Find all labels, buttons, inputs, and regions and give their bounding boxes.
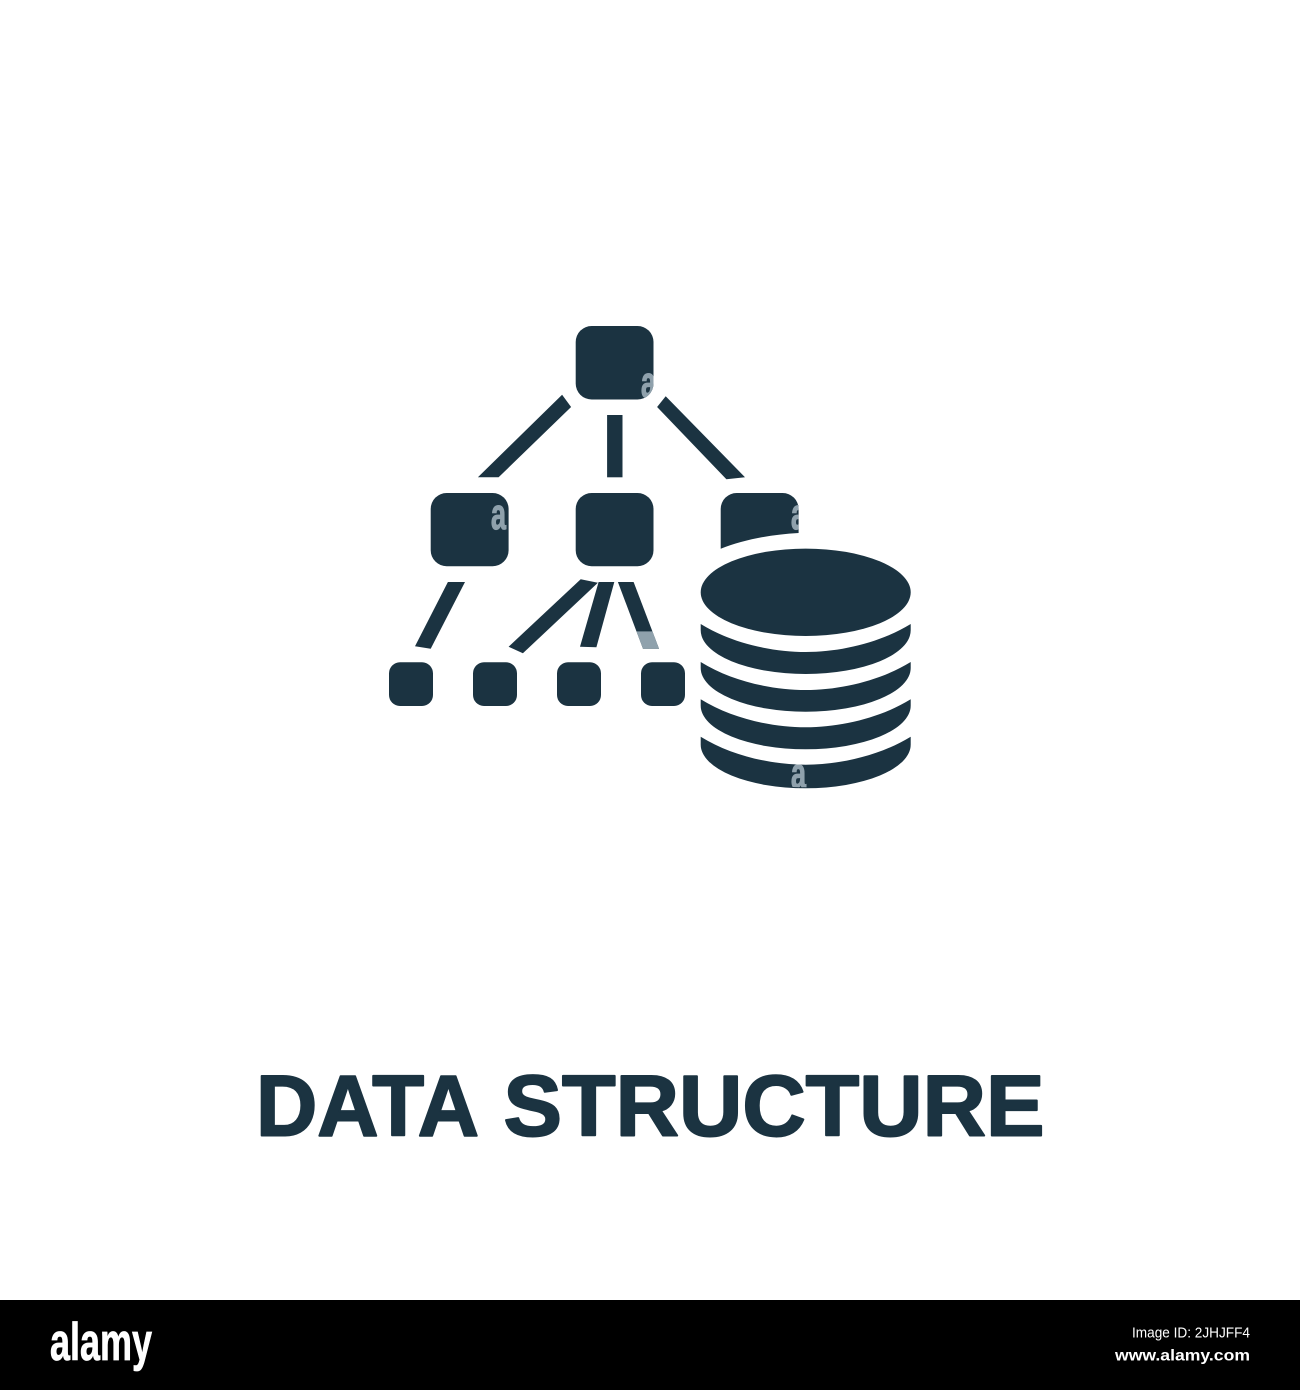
connector: root to center child	[607, 415, 622, 477]
footer bar	[0, 1300, 1300, 1390]
image id: Image ID: 2JHJFF4	[1132, 1324, 1250, 1342]
database band 2	[701, 662, 911, 712]
connector: left child to leaf 1	[415, 582, 465, 649]
watermark marks over icon	[491, 358, 806, 798]
title word: DATA: DATA	[256, 1058, 479, 1154]
leaf node 3	[557, 662, 601, 706]
watermark letter on right child: a	[791, 490, 806, 539]
leaf node 4	[641, 662, 685, 706]
leaf node 1	[389, 662, 433, 706]
connector: center child to leaf 2	[509, 579, 598, 653]
connector: center child to leaf 4	[618, 582, 659, 649]
right child node, cut by database	[721, 493, 799, 549]
infographic canvas	[0, 326, 1300, 1390]
database band 4	[701, 737, 911, 788]
icon: hierarchy tree with database	[389, 326, 911, 788]
title word: STRUCTURE: STRUCTURE	[504, 1058, 1044, 1154]
alamy logo wordmark: alamy	[50, 1313, 152, 1372]
database top disc	[701, 549, 911, 636]
title	[256, 1058, 1044, 1154]
footer background	[0, 1300, 1300, 1390]
website: www.alamy.com	[1114, 1348, 1250, 1364]
database band 1	[701, 624, 911, 674]
watermark letter on database base: a	[791, 749, 806, 798]
database band 3	[701, 699, 911, 749]
leaf node 2	[473, 662, 517, 706]
left child node	[431, 493, 509, 566]
watermark letter on root node: a	[641, 358, 656, 407]
watermark tint on connector	[636, 631, 659, 648]
connector: root to left child	[478, 395, 571, 477]
connector: root to right child	[657, 396, 745, 479]
watermark letter on left child: a	[491, 490, 506, 539]
center child node	[576, 493, 654, 566]
root node	[576, 326, 654, 400]
connector: center child to leaf 3	[580, 582, 614, 647]
